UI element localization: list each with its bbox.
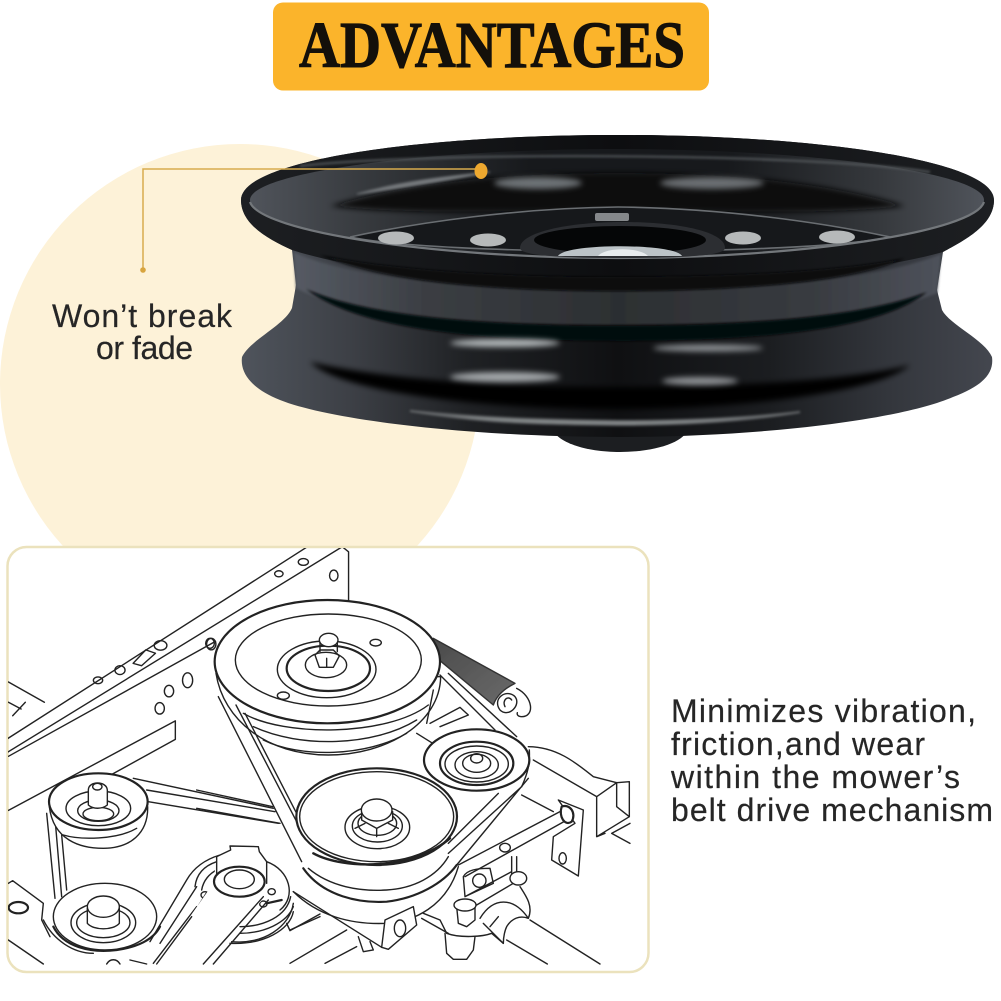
callout text line 1: Won’t break xyxy=(52,298,233,334)
callout text line 2: or fade xyxy=(96,330,193,366)
panel: belt drive diagram xyxy=(6,547,648,972)
groove xyxy=(306,289,927,341)
callout end dot xyxy=(140,267,146,273)
pulley hub below xyxy=(552,428,688,452)
callout leader line xyxy=(143,169,480,268)
product photo: black idler pulley xyxy=(241,135,994,452)
dish shading xyxy=(250,156,984,258)
text block: vibration benefit xyxy=(670,693,993,828)
left side pulleys and belts xyxy=(8,773,320,964)
right idler pulley xyxy=(424,729,529,791)
linkage bracket and arm xyxy=(458,795,583,877)
callout: won't break or fade xyxy=(52,163,488,366)
title banner: ADVANTAGES xyxy=(299,9,685,82)
main pulleys xyxy=(197,600,630,964)
lower linkage and shaft xyxy=(423,857,600,964)
tensioner arm xyxy=(157,846,268,964)
lower left pulley xyxy=(43,883,160,953)
callout dot on rim xyxy=(474,163,488,179)
pulley dish xyxy=(250,149,984,258)
benefit line 4: belt drive mechanism xyxy=(671,792,993,828)
tensioner sheave xyxy=(190,862,320,942)
lower flange stripes and highlights xyxy=(310,339,910,425)
pulley body xyxy=(241,135,994,437)
cross belts under pulley xyxy=(197,790,280,823)
deck frame xyxy=(6,547,349,810)
pulley outer rim xyxy=(241,135,994,280)
pulley bolts xyxy=(378,230,855,246)
benefit line 1: Minimizes vibration, xyxy=(671,693,976,729)
lower deck lines and bolt bracket xyxy=(290,892,448,963)
belt up to tensioner xyxy=(130,855,220,964)
belt runs xyxy=(47,778,278,898)
large pulley xyxy=(206,600,441,755)
background: cream circle xyxy=(0,144,480,624)
pulley centre bearing xyxy=(520,213,725,258)
belt and lower sheave xyxy=(293,778,528,924)
deck plate and hole xyxy=(8,881,120,964)
belt to right idler xyxy=(417,673,517,743)
outer belt edge xyxy=(522,750,529,787)
benefit line 3: within the mower’s xyxy=(670,759,960,795)
spring xyxy=(433,638,531,717)
centre pulley xyxy=(296,768,457,865)
rim dark band xyxy=(320,255,905,291)
frame beam xyxy=(528,747,630,843)
benefit line 2: friction,and wear xyxy=(671,726,925,762)
tensioner lower rings xyxy=(230,907,293,943)
pulley middle band xyxy=(294,252,941,325)
upper left idler pulley xyxy=(49,773,148,848)
long left belt xyxy=(218,697,302,862)
